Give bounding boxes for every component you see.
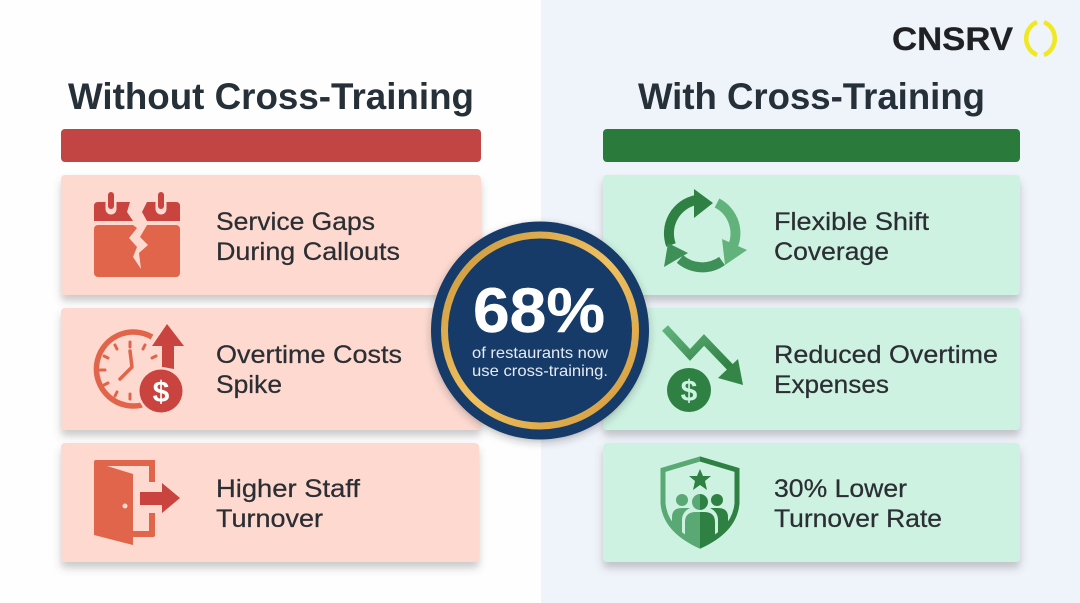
- text: overtime costs: Overtime Costs: [216, 341, 402, 369]
- text: lower turnover: Turnover Rate: [774, 505, 942, 533]
- card: overtime costs: [61, 308, 481, 430]
- card: service gaps: [61, 175, 481, 295]
- red header bar: [61, 129, 481, 162]
- heading: with cross-training: With Cross-Training: [638, 76, 985, 117]
- card: lower turnover: [603, 443, 1020, 562]
- text: flexible shift coverage: Flexible Shift: [774, 208, 929, 236]
- text: staff turnover: Higher Staff: [216, 475, 360, 503]
- logo: CNSRV: [892, 21, 1055, 57]
- text: staff turnover: [216, 475, 360, 533]
- text: lower turnover: 30% Lower: [774, 475, 907, 503]
- text: reduced overtime: Expenses: [774, 371, 889, 399]
- icon: team shield: [663, 459, 737, 546]
- stat caption: of restaurants now: [472, 345, 608, 362]
- stat number: 68%: [473, 276, 605, 346]
- icon: rotating arrows: [664, 189, 747, 267]
- icon: exit door: [94, 460, 180, 545]
- text: reduced overtime: Reduced Overtime: [774, 341, 998, 369]
- icon: clock with rising cost: $: [153, 376, 170, 409]
- text: staff turnover: Turnover: [216, 505, 323, 533]
- text: lower turnover: [774, 475, 942, 533]
- text: reduced overtime: [774, 341, 998, 399]
- text: service gaps: During Callouts: [216, 238, 400, 266]
- text: service gaps: Service Gaps: [216, 208, 375, 236]
- card: staff turnover: [61, 443, 479, 562]
- text: service gaps: [216, 208, 400, 266]
- logo: CNSRV: CNSRV: [892, 21, 1014, 57]
- stat caption: use cross-training.: [472, 363, 608, 380]
- callout: 68% statistic badge: [431, 222, 649, 440]
- icon: broken calendar: [94, 195, 180, 277]
- icon: falling cost: $: [681, 375, 698, 408]
- green header bar: [603, 129, 1020, 162]
- card: flexible shift coverage: [603, 175, 1020, 295]
- icon: clock with rising cost: [96, 324, 185, 415]
- panel: without cross-training: [61, 76, 481, 562]
- text: flexible shift coverage: Coverage: [774, 238, 889, 266]
- panel: with cross-training: [603, 76, 1020, 562]
- heading: without cross-training: Without Cross-Training: [68, 76, 474, 117]
- card: reduced overtime: [603, 308, 1020, 430]
- text: overtime costs: Spike: [216, 371, 282, 399]
- text: flexible shift coverage: [774, 208, 929, 266]
- stat caption: [472, 345, 608, 380]
- text: overtime costs: [216, 341, 402, 399]
- icon: falling cost: [665, 328, 743, 412]
- background: right half: [541, 0, 1080, 603]
